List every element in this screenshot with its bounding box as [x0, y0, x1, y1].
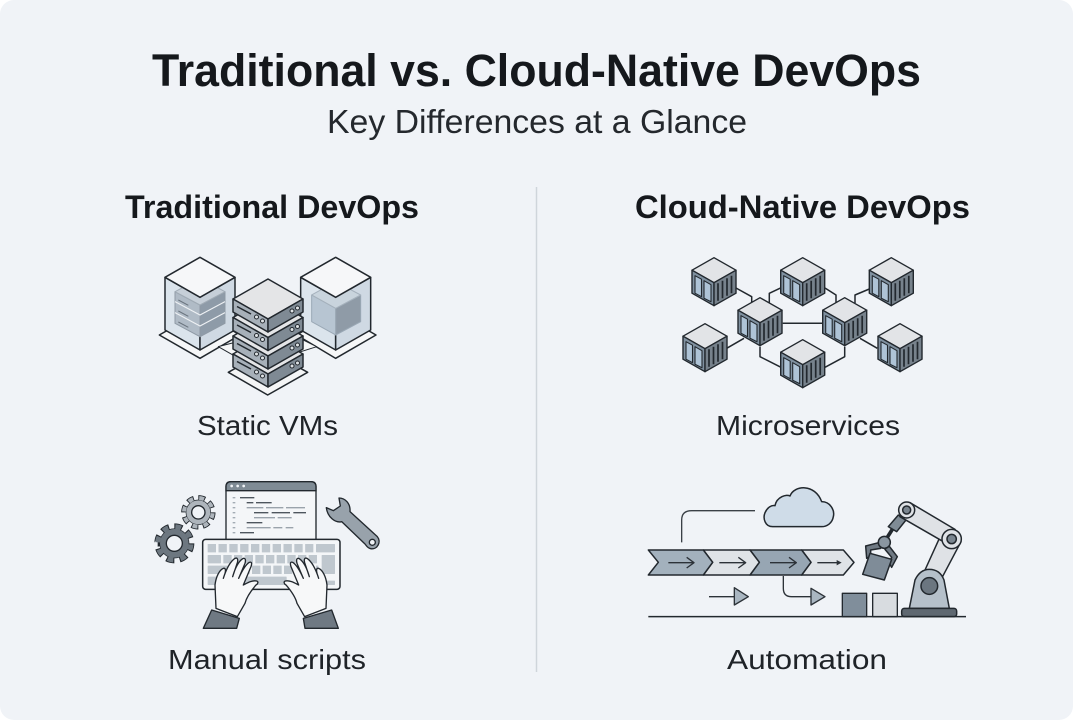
panel: cloud-native devops [635, 189, 970, 675]
icon: small gear [184, 498, 213, 527]
icon: robot arm [863, 502, 961, 617]
label: manual scripts: Manual scripts [168, 644, 366, 675]
heading: traditional devops: Traditional DevOps [125, 189, 419, 225]
label: automation: Automation [727, 644, 887, 675]
icon: large gear [158, 527, 191, 560]
icon: wrench [326, 498, 379, 549]
icon: right hand and sleeve [284, 558, 338, 628]
subtitle: Key Differences at a Glance [327, 103, 747, 140]
label: static VMs: Static VMs [197, 410, 338, 441]
title: Traditional vs. Cloud-Native DevOps [152, 45, 921, 96]
panel: traditional devops [125, 189, 419, 675]
heading: cloud-native devops: Cloud-Native DevOps [635, 189, 970, 225]
icon: static VM servers [159, 257, 376, 395]
crates on the floor [842, 593, 897, 617]
icon: keyboard [203, 539, 340, 589]
icon: code window [226, 482, 316, 541]
label: microservices: Microservices [716, 410, 900, 441]
icon: cloud [764, 488, 834, 527]
pipeline chevrons [648, 550, 854, 575]
arrow: branching flow [783, 576, 825, 605]
icon: automation pipeline and robot arm [648, 488, 966, 617]
icon: left hand and sleeve [203, 558, 258, 628]
floor line [648, 614, 966, 619]
connector: pipeline to cloud [682, 511, 755, 542]
icon: manual scripting at keyboard [158, 482, 379, 628]
icon: microservices container network [683, 258, 922, 388]
arrow: straight flow [709, 588, 748, 605]
